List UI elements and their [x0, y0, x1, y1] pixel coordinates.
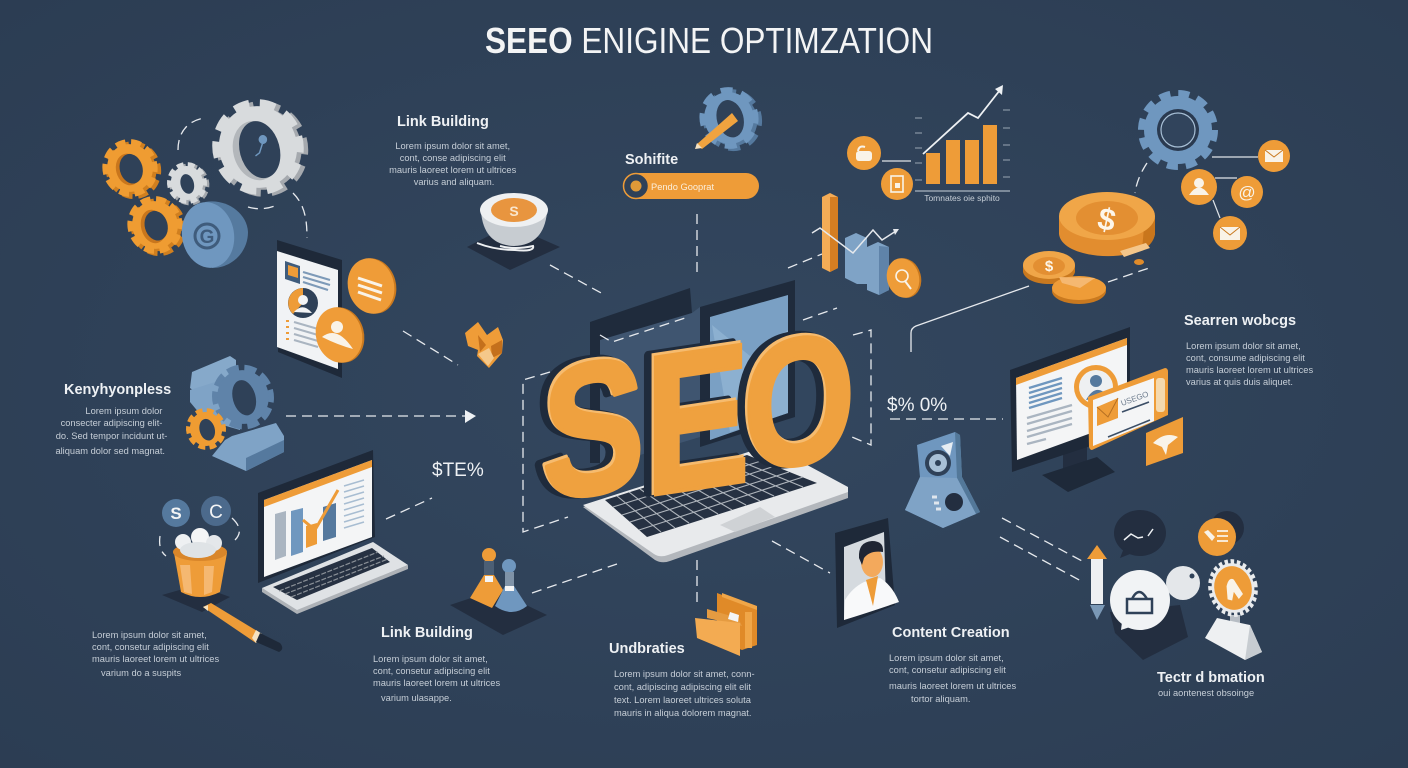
text block: link building bottom: Lorem ipsum dolor sit amet,	[373, 654, 488, 664]
SEO 3D letters: S	[542, 316, 645, 541]
icon: gear with contact badges top right	[1135, 94, 1290, 250]
connector lines	[286, 214, 1152, 608]
icon: desktop monitor	[1010, 327, 1183, 492]
text block: bottom left lorem: cont, consetur adipiscing elit	[92, 642, 209, 652]
text block: content creation: Lorem ipsum dolor sit amet,	[889, 653, 1004, 663]
text block: keywords: Kenyhyonpless	[64, 382, 171, 398]
text block: searren webcgs: Lorem ipsum dolor sit amet,	[1186, 341, 1301, 351]
icon: lab flasks	[450, 548, 547, 635]
text block: link building bottom	[373, 625, 503, 703]
text block: bottom left lorem	[92, 630, 222, 678]
text block: technical information: Tectr d bmation	[1157, 670, 1265, 686]
text block: link building bottom: mauris laoreet lorem ut ultrices	[373, 678, 500, 688]
text block: link building bottom: Link Building	[381, 625, 473, 641]
text block: searren webcgs	[1184, 313, 1316, 387]
text block: keywords: Lorem ipsum dolor	[85, 406, 162, 416]
icon: laptop with chart	[258, 450, 408, 614]
icon: dollar coins	[1023, 192, 1155, 304]
central seo laptop	[534, 280, 855, 562]
laptop base	[583, 445, 848, 562]
pill: Sohifite: Sohifite	[625, 152, 678, 168]
text block: keywords: aliquam dolor sed magnat.	[55, 446, 165, 456]
text block: undbraties: Lorem ipsum dolor sit amet, conn-	[614, 669, 755, 679]
icon: bowl	[467, 193, 560, 270]
pill: Sohifite: Pendo Gooprat	[651, 182, 714, 192]
text block: link building bottom: varium ulasappe.	[381, 693, 452, 703]
stat: $TE%: $TE%	[432, 460, 484, 481]
text block: bottom left lorem: Lorem ipsum dolor sit amet,	[92, 630, 207, 640]
text block: link building top: mauris laoreet lorem ut ultrices	[389, 165, 517, 175]
icon: bucket with coins: C	[209, 502, 223, 523]
text block: undbraties: cont, adipiscing adipiscing elit elit	[614, 682, 751, 692]
SEO 3D letters: S	[534, 314, 637, 539]
icon: pencil, chat bubbles and badge	[1087, 510, 1262, 660]
text block: content creation: cont, consetur adipiscing elit	[889, 665, 1006, 675]
text block: undbraties: Undbraties	[609, 641, 685, 657]
big grey gear	[207, 94, 313, 202]
back screens	[590, 280, 795, 467]
SEO 3D letters: O	[743, 293, 855, 510]
text block: technical information	[1157, 670, 1265, 698]
grey small gear	[166, 161, 211, 207]
orange gear one	[101, 137, 163, 201]
text block: searren webcgs: cont, consume adipiscing elit	[1186, 353, 1305, 363]
icon: dollar coins: $	[1095, 201, 1119, 238]
icon: bucket with coins: S	[170, 504, 182, 523]
icon: speaker device	[905, 432, 980, 528]
text block: link building top: cont, conse adipiscing elit	[400, 153, 506, 163]
icon: small orange cube link	[465, 322, 503, 368]
text block: searren webcgs: Searren wobcgs	[1184, 313, 1296, 329]
text block: bottom left lorem: mauris laoreet lorem ut ultrices	[92, 654, 219, 664]
text block: searren webcgs: varius at quis duis aliquet.	[1186, 377, 1293, 387]
blue G disc: G	[200, 227, 214, 248]
text block: content creation: mauris laoreet lorem ut ultrices	[889, 681, 1016, 691]
SEO 3D letters: O	[741, 291, 853, 508]
SEO 3D letters: O	[735, 291, 847, 508]
text block: keywords	[55, 382, 171, 456]
text block: undbraties: mauris in aliqua dolorem magnat.	[614, 708, 751, 718]
SEO 3D letters	[534, 291, 855, 541]
title: SEEO ENIGINE OPTIMZATION	[485, 20, 933, 61]
text block: bottom left lorem: varium do a suspits	[101, 668, 181, 678]
SEO 3D letters: E	[645, 301, 750, 539]
SEO 3D letters: E	[643, 299, 748, 537]
icon: portrait tablet	[835, 518, 899, 628]
icon: folders	[695, 593, 757, 656]
blue G disc	[177, 198, 248, 272]
text block: link building top: Link Building	[397, 114, 489, 130]
SEO 3D letters: S	[540, 314, 643, 539]
icon: gear with contact badges top right: @	[1238, 183, 1256, 202]
icon: desktop monitor: USEGO	[1120, 390, 1150, 408]
chart: isometric column chart with magnifier	[812, 193, 926, 301]
text block: content creation: tortor aliquam.	[911, 694, 970, 704]
chart: rising bars with icons	[847, 85, 1010, 203]
icon: gear stack left	[185, 356, 284, 471]
icon: bucket with coins	[160, 496, 282, 652]
text block: link building bottom: cont, consetur adipiscing elit	[373, 666, 490, 676]
text block: link building top	[389, 114, 519, 187]
text block: technical information: oui aontenest obsoinge	[1158, 688, 1254, 698]
text block: link building top: varius and aliquam.	[414, 177, 494, 187]
icon: bowl: S	[509, 203, 519, 219]
text block: searren webcgs: mauris laoreet lorem ut ultrices	[1186, 365, 1313, 375]
text block: keywords: consecter adipiscing elit-	[61, 418, 162, 428]
icon: gear cluster top left	[101, 94, 313, 272]
icon: tablet with profile badges	[277, 240, 402, 378]
orange gear two	[126, 194, 188, 258]
SEO 3D letters: E	[637, 299, 742, 537]
text block: content creation: Content Creation	[892, 625, 1010, 641]
icon: dollar coins: $	[1045, 258, 1054, 275]
icon: gear with pencil top	[695, 85, 764, 154]
stat: $/0%: $% 0%	[887, 395, 947, 416]
text block: content creation	[889, 625, 1019, 704]
text block: undbraties	[609, 641, 757, 718]
text block: undbraties: text. Lorem laoreet ultrices soluta	[614, 695, 752, 705]
pill: Sohifite	[623, 152, 759, 199]
text block: link building top: Lorem ipsum dolor sit amet,	[395, 141, 510, 151]
chart: rising bars with icons: Tomnates oie sphito	[924, 193, 1000, 203]
text block: keywords: do. Sed tempor incidunt ut-	[56, 431, 167, 441]
